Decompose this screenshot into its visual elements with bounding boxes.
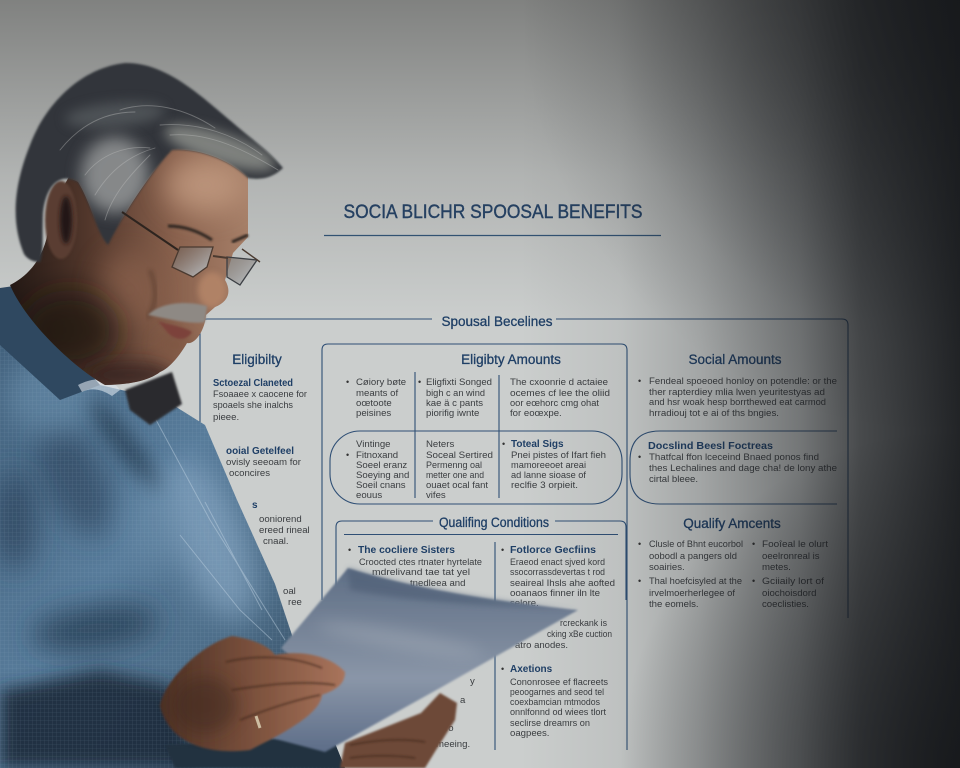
panel: rounded row Vintinge / Neters / Toteal Sigs: •: [346, 450, 349, 460]
document paper: [272, 568, 578, 752]
panel: right Social Amounts column: •: [638, 376, 641, 386]
panel: Qualifying Conditions: rcreckank is: [560, 618, 607, 629]
panel: Qualifying Conditions: cking xBe cuction: [547, 629, 612, 640]
panel: Qualifying Conditions: Axetions: [510, 664, 553, 675]
panel: right rounded row Docslind Beesl Foctreas: Docslind Beesl Foctreas: [648, 441, 773, 452]
column dividers: [415, 372, 499, 498]
panel: right Qualify Amcents: Gciiaily lort of: [762, 576, 824, 587]
text block: eligibility amounts top row: piorifig iwnte: [426, 408, 479, 419]
panel: rounded row Vintinge / Neters / Toteal Sigs: ouaet ocal fant: [426, 480, 488, 491]
panel: Qualifying Conditions: a: [460, 695, 466, 706]
panel: left Eligibility column: ooniorend: [259, 514, 302, 525]
panel: rounded row Vintinge / Neters / Toteal Sigs: Neters: [426, 439, 454, 450]
panel: right Qualify Amcents: •: [638, 539, 641, 549]
panel: right Social Amounts column: Social Amounts: [688, 352, 782, 367]
text block: eligibility amounts top row: ocemes cf lee the oliid: [510, 388, 610, 399]
panel: right Qualify Amcents: Qualify Amcents: [683, 516, 781, 531]
text block: eligibility amounts top row: oor eœhorc cmg ohat: [510, 398, 599, 409]
panel: Qualifying Conditions: y: [470, 676, 475, 687]
panel: right Qualify Amcents: •: [752, 576, 755, 586]
face shading: [20, 157, 245, 389]
panel: right Qualify Amcents: Fooîeal le olurt: [762, 539, 828, 550]
panel: right Qualify Amcents: soairies.: [649, 562, 685, 573]
panel: right Qualify Amcents: •: [752, 539, 755, 549]
panel: right rounded row Docslind Beesl Foctreas: cirtal bleee.: [649, 474, 698, 485]
panel: left Eligibility column: pieee.: [213, 412, 239, 423]
text block: eligibility amounts top row: [346, 377, 610, 419]
panel: rounded row Vintinge / Neters / Toteal Sigs: Soeel eranz: [356, 460, 407, 471]
text block: eligibility amounts top row: Eligfixti Songed: [426, 377, 492, 388]
heading: Eligibility Amounts: Eligibty Amounts: [461, 352, 561, 367]
panel: right Qualify Amcents: •: [638, 576, 641, 586]
panel: Qualifying Conditions: oagpees.: [510, 728, 549, 739]
panel: Qualifying Conditions: meeing.: [436, 739, 470, 750]
head and face: [10, 145, 248, 389]
panel: left Eligibility column: oconcires: [229, 468, 270, 479]
shirt torso: [0, 345, 345, 768]
panel: Qualifying Conditions: •: [501, 664, 504, 674]
panel: rounded row Vintinge / Neters / Toteal Sigs: metter one and: [426, 470, 484, 481]
panel: left Eligibility column: Fsoaaee x caocene for: [213, 389, 308, 400]
lower hand: [340, 693, 457, 768]
panel: right Qualify Amcents: Thal hoefcisyled at the: [649, 576, 742, 587]
gray hair highlights: [64, 99, 280, 213]
panel: Qualifying Conditions: Qualifing Conditions: [439, 515, 549, 530]
panel: left Eligibility column: ovisly seeoam for: [226, 457, 302, 468]
panel: rounded row Vintinge / Neters / Toteal Sigs: Permenng oal: [426, 460, 482, 471]
panel: Qualifying Conditions: tnedleea and: [410, 578, 465, 589]
panel: Qualifying Conditions: onnlfonnd od wiees tlort: [510, 707, 606, 718]
panel: Qualifying Conditions: ooanaos finner iln lte: [510, 588, 600, 599]
panel: Qualifying Conditions: ssocorrassdevertas t rod: [510, 567, 605, 578]
panel: Qualifying Conditions: seaireal Ihsls ahe aofted: [510, 578, 615, 589]
panel: right rounded row Docslind Beesl Foctreas: thes Lechalines and dage cha! de lony athe: [649, 463, 837, 474]
figure: man reading document: [0, 63, 578, 768]
icon: eyeglasses: [122, 212, 260, 285]
panel: right rounded row Docslind Beesl Foctreas: •: [638, 452, 641, 462]
panel: right Qualify Amcents: the eomels.: [649, 599, 699, 610]
text block: eligibility amounts top row: peisines: [356, 408, 391, 419]
upper hand holding document: [160, 636, 345, 751]
text block: eligibility amounts top row: for eoœxpe.: [510, 408, 562, 419]
panel: rounded row Vintinge / Neters / Toteal Sigs: Pnei pistes of Ifart fieh: [511, 450, 606, 461]
panel: Qualifying Conditions: Eraeod enact sjved kord: [510, 557, 605, 568]
text block: eligibility amounts top row: oœtoote: [356, 398, 392, 409]
panel: right Qualify Amcents: oiochoisdord: [762, 588, 816, 599]
panel: Qualifying Conditions: peoogarnes and seod tel: [510, 687, 604, 698]
panel: right rounded row Docslind Beesl Foctreas: [630, 431, 837, 504]
panel: right Qualify Amcents: coeclisties.: [762, 599, 809, 610]
hair: [16, 63, 283, 262]
panel: left Eligibility column: s: [252, 500, 258, 511]
panel: rounded row Vintinge / Neters / Toteal Sigs: Soeying and: [356, 470, 409, 481]
text block: eligibility amounts top row: Cøiory bøte: [356, 377, 406, 388]
panel: left Eligibility column: ereed rineal: [259, 525, 310, 536]
panel: Qualifying Conditions: seclirse dreamrs on: [510, 718, 590, 729]
text block: eligibility amounts top row: •: [346, 377, 349, 387]
panel: Qualifying Conditions: selore.: [510, 598, 539, 609]
text block: eligibility amounts top row: The cxoonrie d actaiee: [510, 377, 608, 388]
panel: rounded row Vintinge / Neters / Toteal Sigs: vifes: [426, 490, 446, 501]
panel: Qualifying Conditions: •: [501, 545, 504, 555]
panel: Qualifying Conditions: •: [348, 545, 351, 555]
panel: right Qualify Amcents: irvelmoerherlegee of: [649, 588, 735, 599]
panel: right Qualify Amcents: oeelronreal is: [762, 551, 820, 562]
panel: rounded row Vintinge / Neters / Toteal Sigs: eouus: [356, 490, 382, 501]
panel: Qualifying Conditions: Croocted ctes rtnater hyrtelate: [359, 557, 482, 568]
panel: right Qualify Amcents: oobodl a pangers old: [649, 551, 737, 562]
panel: right Social Amounts column: and hsr woak hesp borrthewed eat carmod: [649, 397, 826, 408]
title: SOCIA BLICHR SPOOSAL BENEFITS: [344, 202, 642, 223]
panel: Qualifying Conditions: Cononrosee ef flacreets: [510, 677, 608, 688]
panel: right Social Amounts column: [638, 352, 837, 419]
panel: rounded row Vintinge / Neters / Toteal Sigs: Toteal Sigs: [511, 439, 564, 450]
panel: right Social Amounts column: Fendeal spoeoed honloy on potendle: or the: [649, 376, 837, 387]
panel: rounded row Vintinge / Neters / Toteal Sigs: ad lanne sioase of: [511, 470, 586, 481]
panel: rounded row Vintinge / Neters / Toteal Sigs: mamoreeoet areai: [511, 460, 586, 471]
panel: rounded row Vintinge / Neters / Toteal Sigs: Fitnoxand: [356, 450, 398, 461]
collar: [0, 284, 182, 425]
text block: eligibility amounts top row: meants of: [356, 388, 398, 399]
text block: eligibility amounts top row: kae ä c pants: [426, 398, 483, 409]
panel: left Eligibility column: oal: [283, 586, 296, 597]
panel: rounded row Vintinge / Neters / Toteal Sigs: reclfie 3 orpieit.: [511, 480, 578, 491]
panel: left Eligibility column: ree: [288, 597, 302, 608]
panel: left Eligibility column: Sctoezal Claneted: [213, 378, 293, 389]
panel: right Qualify Amcents: Clusle of Bhnt eucorbol: [649, 539, 743, 550]
panel: rounded row Vintinge / Neters / Toteal Sigs: Soeil cnans: [356, 480, 406, 491]
panel: Spousal Becelines outer frame: [200, 314, 848, 618]
panel: Qualifying Conditions: [336, 515, 626, 750]
panel: rounded row Vintinge / Neters / Toteal Sigs: [330, 431, 622, 504]
panel: left Eligibility column: ooial Getelfeel: [226, 446, 294, 457]
panel: right Qualify Amcents: metes.: [762, 562, 791, 573]
panel: Eligibility Amounts box: [322, 344, 627, 750]
panel: right rounded row Docslind Beesl Foctreas: Thatfcal ffon lceceind Bnaed ponos find: [649, 452, 819, 463]
panel: right Social Amounts column: hrradiouj tot e ai of ths bngies.: [649, 408, 779, 419]
shirt placket and pocket: [148, 405, 285, 640]
panel: Qualifying Conditions: coexbamcian mtmodos: [510, 697, 600, 708]
panel: right Qualify Amcents: [638, 516, 828, 610]
panel: left Eligibility column: cnaal.: [263, 536, 289, 547]
panel: left Eligibility column: Eligibilty: [232, 352, 282, 367]
panel: rounded row Vintinge / Neters / Toteal Sigs: •: [502, 439, 505, 449]
panel: left Eligibility column: spoaels she inalchs: [213, 400, 293, 411]
panel: Qualifying Conditions: atro anodes.: [515, 640, 568, 651]
text block: eligibility amounts top row: •: [418, 377, 421, 387]
panel: rounded row Vintinge / Neters / Toteal Sigs: Soceal Sertired: [426, 450, 493, 461]
panel: right Social Amounts column: ther rapterdiey mlia lwen yeuritestyas ad: [649, 387, 825, 398]
eyebrows and mustache: [148, 226, 248, 339]
text block: eligibility amounts top row: bigh c an wind: [426, 388, 485, 399]
ear: [45, 181, 77, 259]
panel: Qualifying Conditions: The cocliere Sisters: [358, 545, 455, 556]
panel: Qualifying Conditions: mdrelivand tae tat yel: [372, 567, 470, 578]
panel: left Eligibility column: [213, 352, 310, 608]
panel: rounded row Vintinge / Neters / Toteal Sigs: Vintinge: [356, 439, 390, 450]
panel: Qualifying Conditions: Fotlorce Gecfiins: [510, 545, 596, 556]
panel: Spousal Becelines outer frame: Spousal Becelines: [441, 314, 553, 329]
panel: Qualifying Conditions: ro: [445, 723, 454, 734]
